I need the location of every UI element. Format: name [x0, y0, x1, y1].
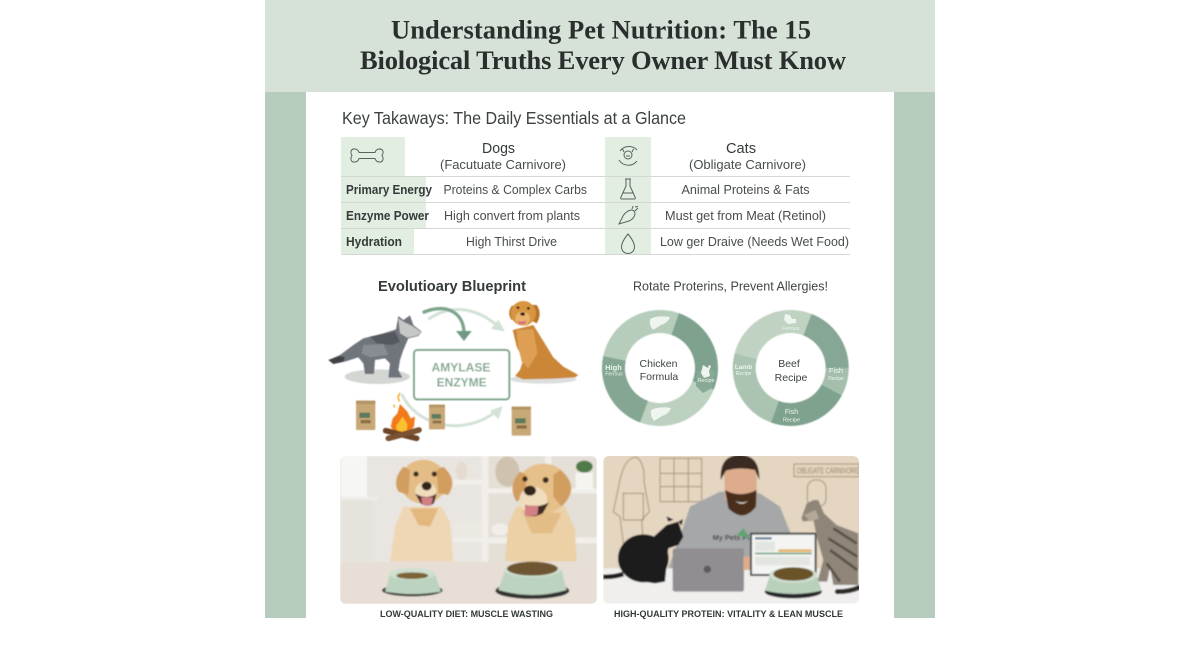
header banner — [265, 0, 935, 92]
segment labels — [605, 363, 715, 384]
cats column heading: Cats — [726, 141, 756, 157]
arrow: dark to enzyme — [423, 309, 472, 341]
segment labels: Lamb — [735, 364, 752, 371]
title: Understanding Pet Nutrition: The 15 — [391, 14, 811, 44]
cats column heading — [689, 141, 806, 172]
heading: evolutionary blueprint: Evolutioary Blueprint — [378, 278, 526, 295]
segment labels: Ferrous — [605, 372, 623, 378]
photo: low-quality diet dogs — [340, 456, 597, 604]
title — [360, 14, 846, 75]
segment labels: Recipe — [697, 378, 715, 384]
segment labels: Recipe — [828, 376, 844, 382]
row: hydration: High Thirst Drive — [466, 235, 557, 249]
row: hydration: Low ger Draive (Needs Wet Food) — [660, 235, 849, 249]
row: enzyme power — [346, 209, 826, 223]
callout: amylase enzyme: AMYLASE — [431, 361, 490, 375]
row: primary energy: Proteins & Complex Carbs — [444, 183, 587, 197]
title: Biological Truths Every Owner Must Know — [360, 45, 846, 75]
section heading: key takeaways: Key Takaways: The Daily Essentials at a Glance — [342, 108, 686, 128]
icon: carrot — [619, 206, 638, 224]
diagram: evolutionary blueprint — [328, 301, 578, 438]
bowl small — [382, 584, 443, 596]
ring chart: beef recipe — [735, 314, 844, 424]
icon: liver top — [650, 316, 670, 330]
row: enzyme power: High convert from plants — [444, 209, 580, 223]
row: hydration — [346, 235, 849, 249]
arrow: pale fire to dog — [402, 394, 503, 426]
ring centre label — [775, 358, 808, 384]
dog: golden retriever — [509, 301, 578, 384]
segment labels: Recipe — [736, 371, 751, 377]
segment labels: Recipe — [783, 418, 800, 424]
row: enzyme power: Must get from Meat (Retinol) — [665, 209, 826, 223]
row: primary energy: Primary Energy — [346, 183, 432, 197]
dogs column heading: Dogs — [482, 141, 515, 157]
heading: rotate proteins: Rotate Proterins, Prevent Allergies! — [633, 278, 828, 294]
arrow: pale wolf to dog — [428, 309, 505, 332]
icon: bone — [351, 149, 383, 162]
icon: flask — [621, 179, 635, 199]
photo: owner with cats and laptop — [603, 455, 860, 603]
dogs column heading — [440, 141, 566, 172]
icon: campfire — [386, 393, 419, 438]
segment labels: High — [605, 363, 622, 372]
page background bands — [265, 92, 935, 618]
icon: kibble bag middle — [429, 405, 445, 429]
ring centre label: Chicken — [640, 358, 678, 370]
icon: liver bottom — [651, 407, 671, 421]
ring centre label — [640, 358, 678, 383]
photo: owner with cats and laptop: My Pets Pi — [713, 535, 749, 542]
segment labels — [735, 326, 844, 424]
callout: amylase enzyme — [414, 350, 509, 399]
dogs column heading: (Facutuate Carnivore) — [440, 157, 566, 172]
bowl large — [494, 586, 570, 600]
icon: kibble bag left — [356, 401, 375, 430]
callout: amylase enzyme: ENZYME — [437, 376, 487, 390]
comparison table — [341, 137, 850, 254]
icon: recipe leaf — [701, 365, 711, 378]
ring chart: chicken formula — [605, 316, 715, 421]
segment labels: Fish — [785, 409, 798, 416]
icon: water drop — [622, 234, 634, 254]
wolf — [328, 315, 422, 384]
ring centre label: Recipe — [775, 372, 808, 384]
segment labels: Fish — [829, 366, 843, 375]
icon: kibble bag right — [512, 407, 531, 436]
row: hydration: Hydration — [346, 235, 402, 249]
infographic canvas — [265, 0, 935, 619]
row: primary energy: Animal Proteins & Fats — [682, 183, 810, 197]
cats column heading: (Obligate Carnivore) — [689, 157, 806, 172]
ring centre label: Formula — [640, 371, 678, 383]
segment labels: Ferrous — [782, 326, 800, 332]
row: primary energy — [346, 183, 810, 197]
caption: high-quality protein: HIGH-QUALITY PROTEIN: VITALITY & LEAN MUSCLE — [614, 609, 843, 620]
photo: owner with cats and laptop: OBLIGATE CARNIVORE — [797, 467, 859, 476]
ring centre label: Beef — [778, 358, 800, 370]
caption: low-quality diet: LOW-QUALITY DIET: MUSCLE WASTING — [380, 609, 553, 620]
icon: protein top — [784, 314, 796, 324]
icon: cat cycle — [619, 146, 637, 165]
row: enzyme power: Enzyme Power — [346, 209, 429, 223]
